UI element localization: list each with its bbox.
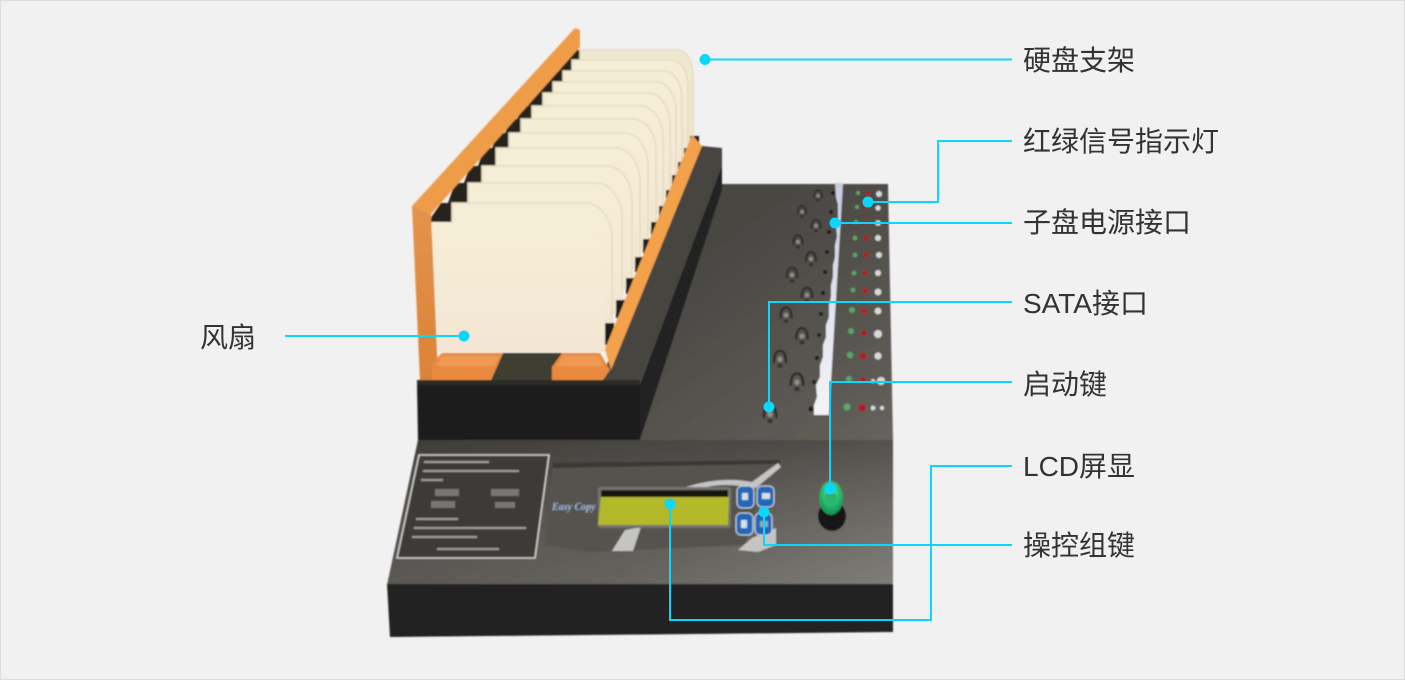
riser black block — [417, 140, 722, 440]
callout: 子盘电源接口: 子盘电源接口 — [1023, 207, 1191, 238]
callout: SATA接口: SATA接口 — [1023, 288, 1148, 319]
callout: 红绿信号指示灯: 红绿信号指示灯 — [1023, 126, 1219, 157]
control keypad — [736, 486, 774, 535]
disk plates back to front — [432, 50, 693, 352]
left orange bar, slanted part — [412, 28, 580, 214]
callout: 风扇: 风扇 — [200, 322, 256, 353]
black teeth, right rail — [605, 136, 699, 345]
callout: 操控组键 — [758, 506, 1135, 561]
bracket feet — [491, 353, 562, 380]
callout: 启动键: 启动键 — [1023, 369, 1107, 400]
left orange bar, front post — [412, 206, 438, 380]
hard disk bracket — [412, 28, 702, 380]
SATA toggle ports — [764, 190, 822, 423]
lower surface shading — [387, 440, 893, 585]
device: hard disk duplicator — [387, 28, 893, 637]
LCD screen — [598, 487, 731, 528]
start button — [818, 481, 846, 531]
callout: 启动键 — [824, 369, 1107, 494]
Easy Copy logo: Easy Copy — [551, 502, 596, 513]
callout: 硬盘支架: 硬盘支架 — [1023, 45, 1135, 76]
main body front face — [387, 584, 893, 637]
black teeth, left rail — [428, 50, 580, 222]
callout: LCD屏显: LCD屏显 — [1023, 451, 1135, 482]
callout: LCD屏显 — [664, 451, 1135, 620]
power interface strip — [814, 183, 843, 415]
callout: SATA接口 — [764, 288, 1148, 412]
main body top surface — [387, 184, 893, 585]
LED indicators — [843, 191, 885, 412]
instruction label plate — [397, 455, 549, 558]
ribbon decorations — [612, 463, 781, 552]
LCD recess — [545, 460, 780, 552]
callout: 操控组键: 操控组键 — [1023, 530, 1135, 561]
callout: 风扇 — [200, 322, 470, 353]
callout: 硬盘支架 — [700, 45, 1135, 76]
callout: 子盘电源接口 — [830, 207, 1191, 238]
right orange rail — [605, 135, 702, 370]
callout: 红绿信号指示灯 — [862, 126, 1219, 208]
